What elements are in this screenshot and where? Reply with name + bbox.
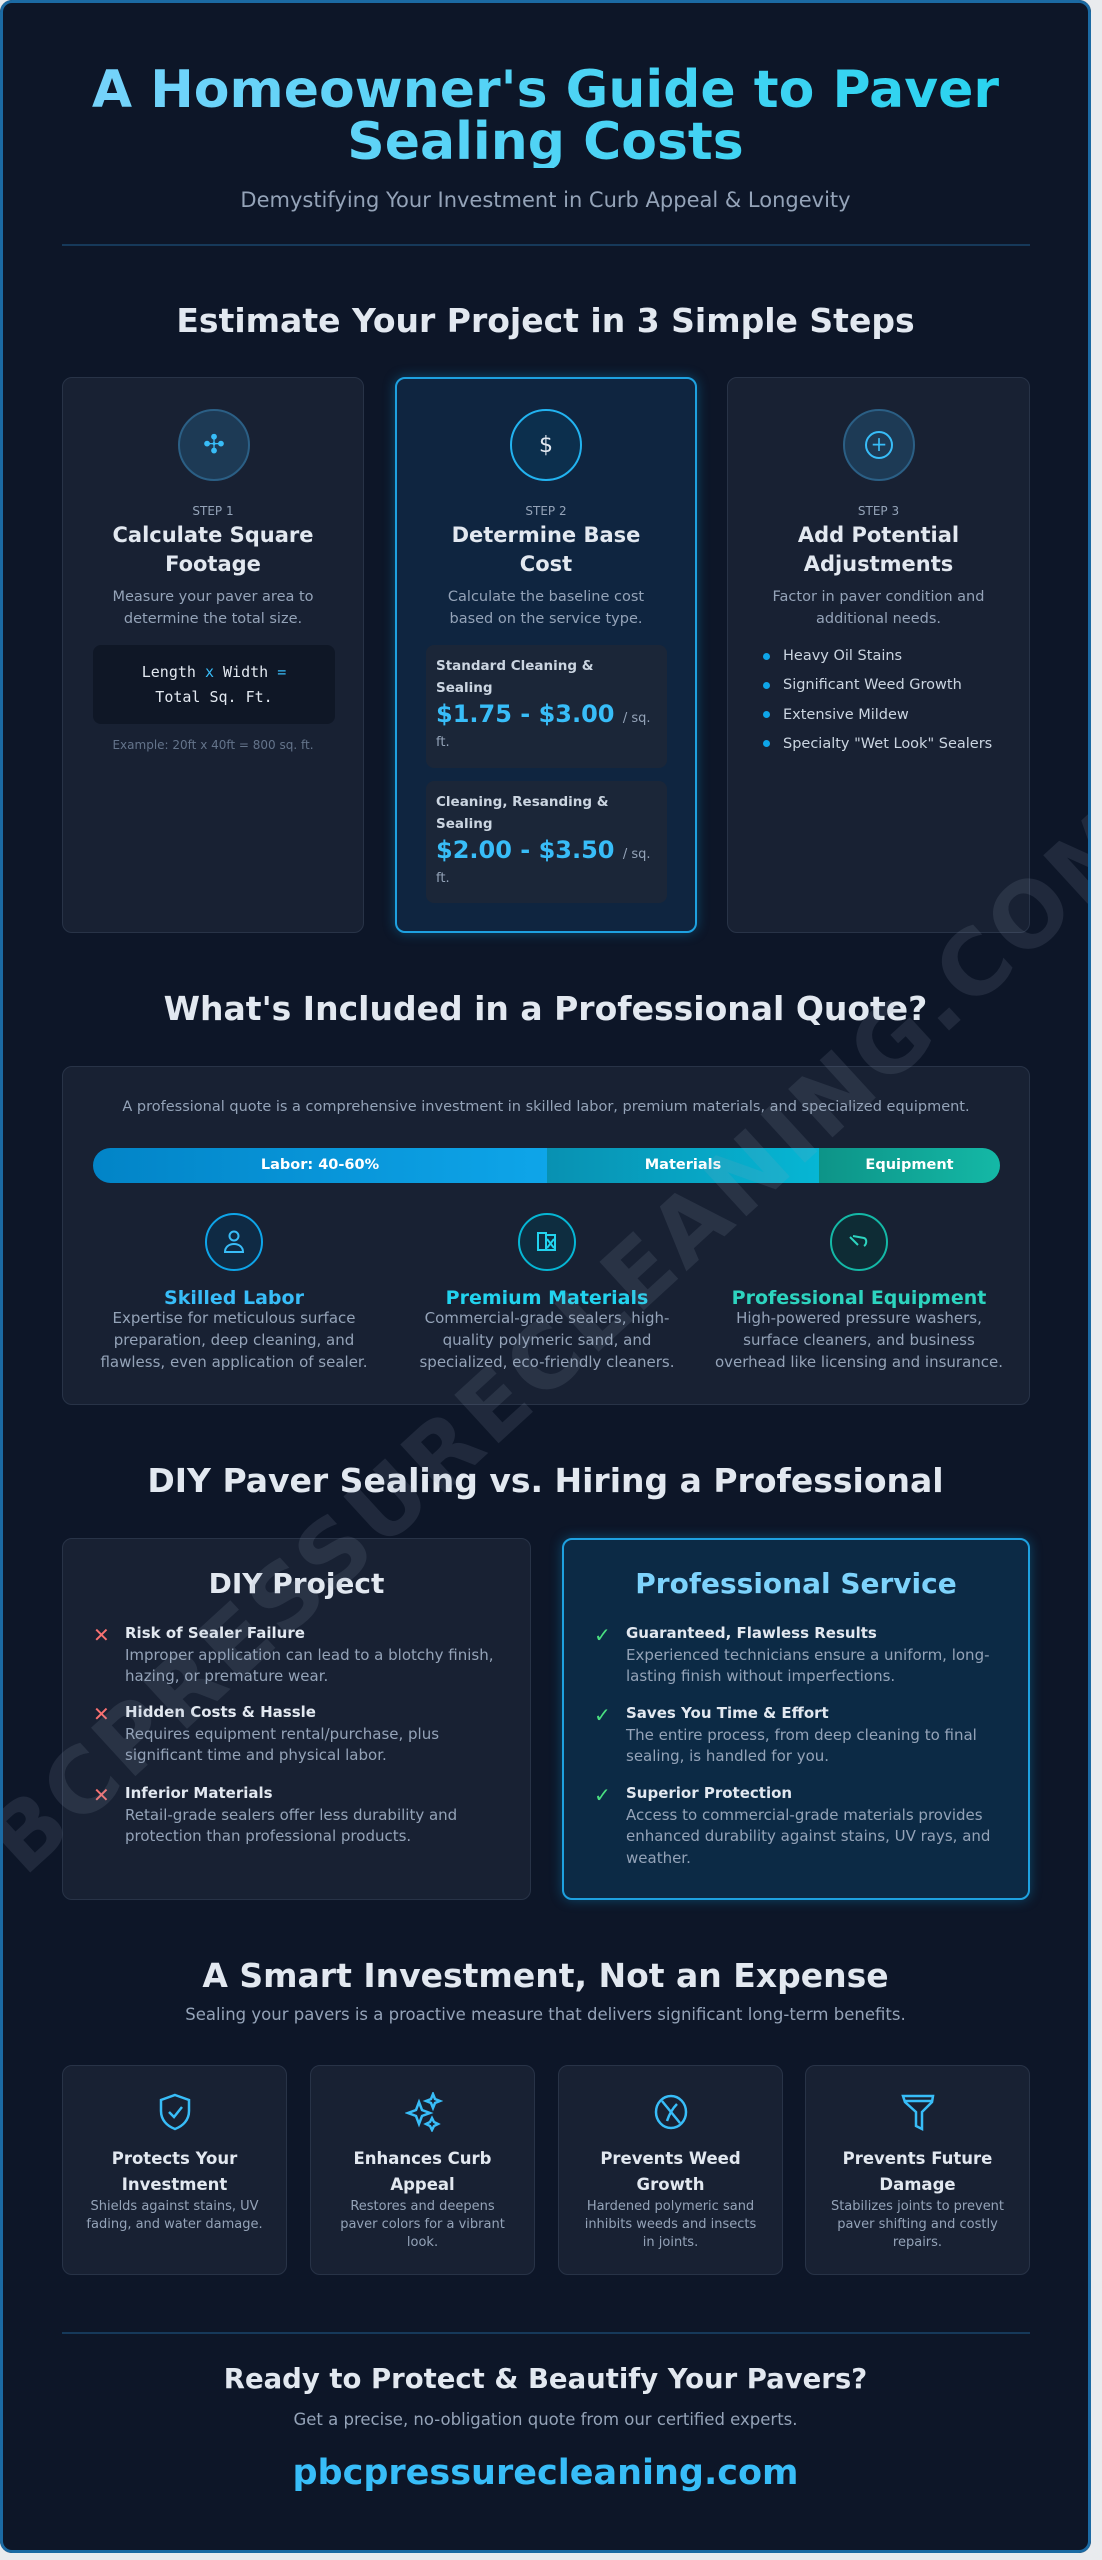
DIY item 2: Hidden Costs & Hassle (125, 1703, 316, 1721)
pro item 1: Guaranteed, Flawless Results (626, 1624, 877, 1642)
step label: STEP 3 (858, 504, 899, 518)
price box: standard: ft. (436, 735, 450, 750)
icon: materials (518, 1213, 576, 1271)
step title (798, 523, 959, 576)
DIY item 1 (93, 1623, 494, 1685)
step title: Cost (520, 552, 572, 576)
DIY item 1: ✕ (93, 1623, 110, 1647)
benefit card: damage (805, 2065, 1030, 2275)
bullet list (763, 648, 992, 752)
icon: sparkles (405, 2092, 443, 2132)
pro title: Professional Service (635, 1567, 957, 1600)
CTA subtitle: Get a precise, no-obligation quote from our certified experts. (293, 2410, 798, 2429)
icon: ruler (178, 409, 250, 481)
item: skilled labor: Expertise for meticulous surface preparation, deep cleaning, and flawless, even application of sealer. (100, 1309, 368, 1371)
DIY item 3 (93, 1783, 457, 1845)
item: professional equipment: High-powered pressure washers, surface cleaners, and business overhead like licensing and insurance. (715, 1309, 1003, 1371)
bullet list: Significant Weed Growth (783, 677, 962, 693)
heading: DIY vs pro: DIY Paver Sealing vs. Hiring a Professional (147, 1461, 944, 1500)
icon: sprayer (830, 1213, 888, 1271)
item: premium materials: Premium Materials (446, 1287, 648, 1309)
DIY item 1: Improper application can lead to a blotchy finish, hazing, or premature wear. (125, 1646, 494, 1685)
benefit card: curb appeal: Appeal (390, 2175, 455, 2194)
pro item 2: Saves You Time & Effort (626, 1704, 829, 1722)
price box: standard: Sealing (436, 680, 493, 696)
benefit card: weeds (558, 2065, 783, 2275)
heading: quote: What's Included in a Professional Quote? (164, 989, 927, 1028)
CTA heading: Ready to Protect & Beautify Your Pavers? (224, 2363, 867, 2395)
pro item 1: ✓ (594, 1623, 611, 1647)
item: skilled labor (100, 1213, 368, 1371)
panel: DIY (62, 1538, 531, 1900)
heading: investment: A Smart Investment, Not an Expense (202, 1956, 889, 1995)
price box: standard (426, 645, 667, 768)
icon: dollar: $ (539, 432, 553, 458)
step desc: Factor in paver condition and additional needs. (773, 589, 984, 627)
price box: standard: Standard Cleaning & (436, 658, 593, 674)
benefit card: protects: Investment (122, 2175, 227, 2194)
icon: funnel (901, 2094, 934, 2131)
DIY item 1: Risk of Sealer Failure (125, 1624, 305, 1642)
price box: resanding: Cleaning, Resanding & (436, 794, 608, 810)
bar chart: cost split (93, 1148, 1000, 1183)
icon: dollar (510, 409, 582, 481)
bar chart: cost split: Materials (645, 1157, 721, 1173)
panel: professional (562, 1538, 1030, 1900)
benefit card: weeds: Prevents Weed (600, 2149, 741, 2168)
intro text: A professional quote is a comprehensive investment in skilled labor, premium materials, and specialized equipment. (122, 1099, 970, 1115)
benefit card: damage: Stabilizes joints to prevent paver shifting and costly repairs. (831, 2199, 1004, 2250)
benefit card: damage: Prevents Future (843, 2149, 992, 2168)
icon: shield (160, 2094, 190, 2130)
DIY title: DIY Project (209, 1567, 384, 1600)
benefit card: curb appeal: Enhances Curb (354, 2149, 492, 2168)
DIY item 2: Requires equipment rental/purchase, plus significant time and physical labor. (125, 1724, 439, 1764)
DIY item 3: ✕ (93, 1783, 110, 1807)
benefit card: weeds: Hardened polymeric sand inhibits weeds and insects in joints. (585, 2199, 756, 2250)
step title: Footage (165, 552, 261, 576)
icon: plus: + (871, 432, 887, 456)
title (0, 64, 1091, 168)
pro item 2 (594, 1703, 977, 1765)
item: premium materials: Commercial-grade sealers, high-quality polymeric sand, and specialized, eco-friendly cleaners. (419, 1309, 674, 1371)
step desc: Measure your paver area to determine the total size. (112, 589, 314, 627)
benefit card: protects: Protects Your (112, 2149, 237, 2168)
title: Sealing Costs (347, 112, 744, 172)
step desc: Calculate the baseline cost based on the service type. (448, 589, 644, 627)
step label: STEP 2 (525, 504, 567, 518)
price box: resanding (426, 781, 667, 903)
icon: ruler: ✣ (203, 430, 225, 460)
benefit card: curb appeal: Restores and deepens paver colors for a vibrant look. (340, 2199, 505, 2250)
step title (452, 523, 640, 576)
DIY item 2 (93, 1702, 439, 1764)
step label: STEP 1 (192, 504, 234, 518)
pro item 3: Access to commercial-grade materials provides enhanced durability against stains, UV rays, and weather. (626, 1806, 990, 1866)
bar chart: cost split: Equipment (865, 1157, 954, 1173)
benefit card: weeds: Growth (637, 2175, 704, 2194)
price box: standard: $1.75 - $3.00 / sq. (436, 700, 651, 728)
pro item 3: Superior Protection (626, 1784, 792, 1802)
bullet list: Heavy Oil Stains (783, 648, 902, 664)
step title: Adjustments (804, 552, 953, 576)
pro item 1 (594, 1623, 990, 1685)
investment subtitle: Sealing your pavers is a proactive measure that delivers significant long-term benefits. (185, 2005, 906, 2024)
step title (112, 523, 314, 576)
pro item 2: ✓ (594, 1703, 611, 1727)
pro item 2: The entire process, from deep cleaning to final sealing, is handled for you. (626, 1726, 977, 1765)
item: professional equipment (715, 1213, 1003, 1371)
pro item 3 (594, 1783, 990, 1866)
formula box: Length x Width = (142, 663, 286, 681)
panel: quote breakdown (62, 1066, 1030, 1405)
icon: no weeds (654, 2094, 688, 2130)
subtitle: Demystifying Your Investment in Curb Appeal & Longevity (240, 188, 851, 212)
step title: Add Potential (798, 523, 959, 547)
step title: Calculate Square (112, 523, 314, 547)
panel: step 1 (62, 377, 364, 933)
price box: resanding: ft. (436, 871, 450, 886)
item: professional equipment: Professional Equipment (732, 1287, 986, 1309)
pro item 3: ✓ (594, 1783, 611, 1807)
CTA url: pbcpressurecleaning.com (292, 2453, 799, 2493)
title: A Homeowner's Guide to Paver (92, 60, 999, 120)
bullet list: Specialty "Wet Look" Sealers (783, 736, 992, 752)
DIY item 3: Retail-grade sealers offer less durability and protection than professional products. (125, 1806, 457, 1845)
price box: resanding: Sealing (436, 816, 493, 832)
item: premium materials (419, 1213, 674, 1371)
panel: step 2 (395, 377, 697, 933)
panel: step 3 (727, 377, 1030, 933)
price box: resanding: $2.00 - $3.50 / sq. (436, 836, 651, 864)
heading: steps: Estimate Your Project in 3 Simple Steps (176, 301, 915, 340)
icon: person (205, 1213, 263, 1271)
icon: plus (843, 409, 915, 481)
benefit card: protects: Shields against stains, UV fading, and water damage. (86, 2199, 263, 2232)
bullet list: Extensive Mildew (783, 707, 909, 723)
formula box (93, 645, 335, 724)
benefit card: curb appeal (310, 2065, 535, 2275)
DIY item 3: Inferior Materials (125, 1784, 273, 1802)
DIY item 2: ✕ (93, 1702, 110, 1726)
benefit card: damage: Damage (879, 2175, 956, 2194)
bar chart: cost split: Labor: 40-60% (261, 1157, 379, 1173)
benefit card: protects (62, 2065, 287, 2275)
pro item 1: Experienced technicians ensure a uniform, long-lasting finish without imperfections. (626, 1646, 990, 1685)
item: skilled labor: Skilled Labor (164, 1287, 304, 1309)
example: Example: 20ft x 40ft = 800 sq. ft. (112, 738, 314, 752)
step title: Determine Base (452, 523, 640, 547)
formula box: Total Sq. Ft. (155, 688, 273, 706)
